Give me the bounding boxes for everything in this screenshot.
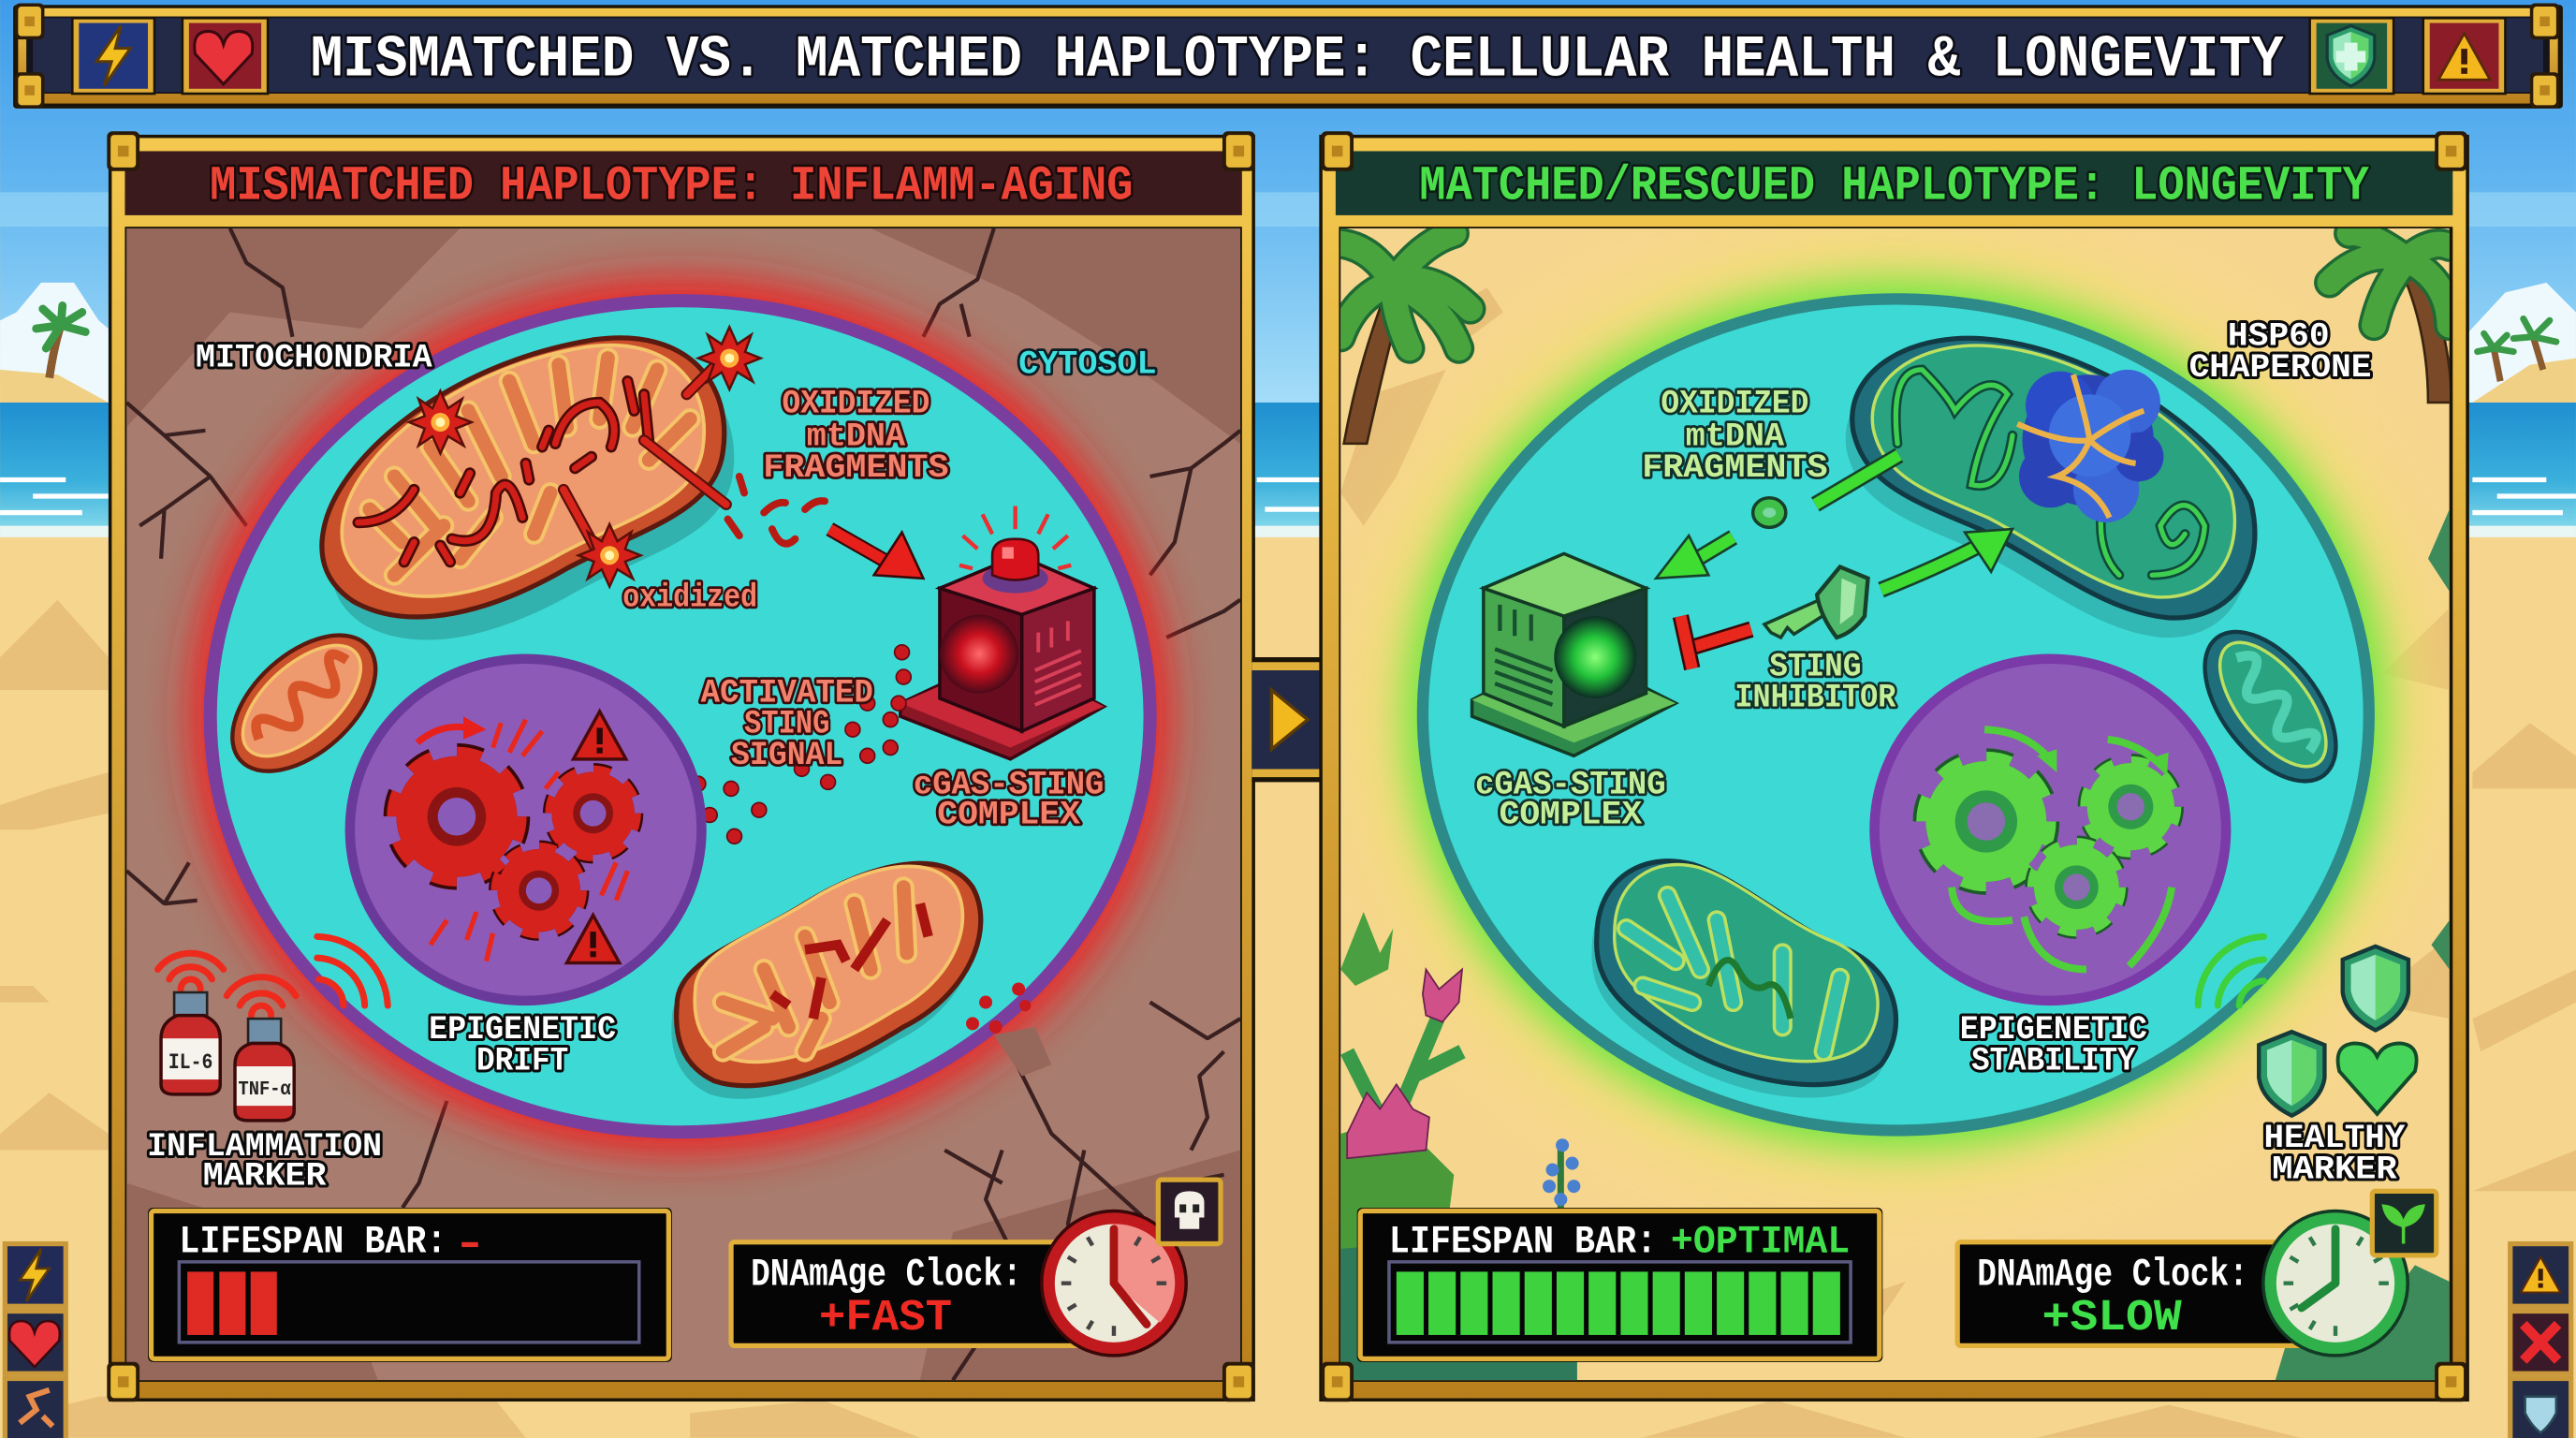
mitochondrion: lower healthy bbox=[1591, 861, 1895, 1098]
icon: palm tree right bbox=[2330, 233, 2452, 403]
icon: heart button bbox=[183, 18, 268, 94]
icon: sting inhibitor key bbox=[1764, 566, 1868, 638]
inflammation waves bbox=[158, 936, 388, 1016]
labels: left panel: mtDNA bbox=[807, 418, 906, 456]
activated STING signal dots bbox=[638, 645, 911, 858]
labels: right panel: HSP60 bbox=[2228, 318, 2330, 356]
DNAmAge clock: fast bbox=[731, 1211, 1186, 1356]
mtDNA fragments bbox=[728, 477, 825, 544]
icon: palm tree left bbox=[1339, 233, 1471, 444]
icon: distant palm left bbox=[37, 305, 85, 378]
mitochondrion: small right bbox=[2179, 609, 2362, 804]
labels: left panel: CYTOSOL bbox=[1018, 345, 1157, 383]
icon: warning button bbox=[2423, 18, 2505, 94]
icon: green waves bbox=[2198, 936, 2263, 1005]
panel: mismatched haplotype bbox=[107, 131, 1255, 1401]
mitochondrion: large damaged bbox=[322, 327, 761, 640]
icon: HSP60 chaperone protein bbox=[2017, 370, 2163, 522]
labels: right panel: EPIGENETIC bbox=[1960, 1011, 2147, 1049]
mitochondrion: small left bbox=[208, 609, 401, 797]
labels: left panel: SIGNAL bbox=[731, 737, 842, 774]
icon: shield button bbox=[2310, 18, 2393, 94]
cracks bbox=[126, 228, 1240, 1380]
labels: left panel: DRIFT bbox=[476, 1043, 568, 1080]
labels: left panel: MITOCHONDRIA bbox=[196, 339, 433, 376]
icon: alarm cGAS-STING complex bbox=[900, 506, 1104, 759]
labels: right panel: STABILITY bbox=[1971, 1043, 2136, 1080]
nucleus: epigenetic stability bbox=[1875, 659, 2226, 1001]
plants: lower right bbox=[2276, 509, 2450, 1380]
labels: right panel: CHAPERONE bbox=[2189, 349, 2371, 387]
membrane breach debris bbox=[966, 983, 1051, 1077]
icon: cGAS-STING complex healthy bbox=[1472, 553, 1676, 756]
lifespan bar: optimal bbox=[1357, 1208, 1882, 1362]
labels: left panel: FRAGMENTS bbox=[763, 449, 949, 487]
labels: right panel: HEALTHY bbox=[2263, 1120, 2405, 1157]
DNAmAge clock: fast: DNAmAge Clock: bbox=[751, 1252, 1022, 1297]
heading: matched: MATCHED/RESCUED HAPLOTYPE: LONGEVITY bbox=[1419, 158, 2369, 213]
lifespan bar: low bbox=[148, 1208, 672, 1362]
labels: right panel: COMPLEX bbox=[1500, 796, 1643, 833]
sandy ground and cell bbox=[1339, 228, 2452, 1380]
icon: TNF-alpha vial: TNF-α bbox=[239, 1078, 291, 1101]
panel frame right bbox=[1319, 135, 2469, 1401]
labels: right panel: STING bbox=[1769, 648, 1862, 685]
DNAmAge clock: slow bbox=[1957, 1211, 2408, 1356]
labels: right panel bbox=[1475, 318, 2405, 1188]
lifespan bar: optimal: +OPTIMAL bbox=[1671, 1219, 1850, 1264]
icon: TNF-alpha vial bbox=[235, 1019, 294, 1121]
labels: left panel: oxidized bbox=[622, 580, 757, 617]
cell membrane bbox=[1423, 299, 2369, 1130]
icon: IL-6 vial bbox=[161, 992, 220, 1094]
labels: left panel: INFLAMMATION bbox=[147, 1128, 382, 1166]
labels: left panel: ACTIVATED bbox=[701, 674, 873, 712]
cracked ground and cell bbox=[126, 228, 1240, 1380]
cell membrane bbox=[211, 301, 1150, 1132]
side icons right bbox=[2510, 1244, 2571, 1438]
icon: IL-6 vial: IL-6 bbox=[168, 1050, 212, 1075]
side icons left bbox=[5, 1244, 66, 1438]
title text: MISMATCHED VS. MATCHED HAPLOTYPE: CELLULAR HEALTH & LONGEVITY bbox=[311, 26, 2284, 94]
arrow: fragments to complex bbox=[829, 529, 923, 579]
heading: mismatched: MISMATCHED HAPLOTYPE: INFLAMM-AGING bbox=[210, 158, 1134, 213]
icon: skull badge bbox=[1158, 1180, 1221, 1244]
labels: left panel: STING bbox=[744, 706, 829, 743]
labels: left panel: MARKER bbox=[203, 1157, 327, 1195]
icon: sprout badge bbox=[2372, 1191, 2437, 1255]
panel frame left bbox=[109, 135, 1255, 1401]
mitochondrion: lower damaged bbox=[671, 863, 981, 1099]
plants: lower left bbox=[1340, 912, 1580, 1380]
labels: left panel bbox=[147, 339, 1157, 1195]
labels: left panel: COMPLEX bbox=[937, 796, 1081, 833]
panel: matched haplotype bbox=[1319, 131, 2469, 1401]
labels: right panel: OXIDIZED bbox=[1661, 386, 1808, 423]
mitochondrion: large with HSP60 bbox=[1846, 338, 2255, 638]
arrow: mismatched to matched bbox=[1251, 657, 1325, 782]
cell glow bbox=[191, 279, 1170, 1153]
labels: right panel: MARKER bbox=[2272, 1151, 2398, 1188]
labels: right panel: cGAS-STING bbox=[1475, 767, 1666, 804]
DNAmAge clock: slow: DNAmAge Clock: bbox=[1977, 1252, 2248, 1297]
arrows: green pathway and red inhibition bbox=[1656, 455, 2012, 668]
labels: right panel: INHIBITOR bbox=[1734, 680, 1896, 717]
icon: lightning button bbox=[72, 18, 154, 94]
labels: right panel: mtDNA bbox=[1686, 418, 1785, 456]
icon: healthy marker shields and heart bbox=[2259, 946, 2417, 1116]
cell glow bbox=[1367, 242, 2424, 1188]
nucleus: epigenetic drift bbox=[350, 659, 701, 1001]
labels: left panel: cGAS-STING bbox=[914, 767, 1104, 804]
labels: left panel: OXIDIZED bbox=[782, 386, 929, 423]
DNAmAge clock: fast: +FAST bbox=[819, 1294, 952, 1343]
lifespan bar: optimal: LIFESPAN BAR: bbox=[1389, 1219, 1657, 1264]
DNAmAge clock: slow: +SLOW bbox=[2042, 1294, 2182, 1343]
lifespan bar: low: LIFESPAN BAR: bbox=[179, 1219, 446, 1264]
icon: distant palms right bbox=[2478, 318, 2556, 381]
labels: right panel: FRAGMENTS bbox=[1642, 449, 1828, 487]
title banner bbox=[13, 4, 2563, 109]
labels: left panel: EPIGENETIC bbox=[429, 1011, 616, 1049]
